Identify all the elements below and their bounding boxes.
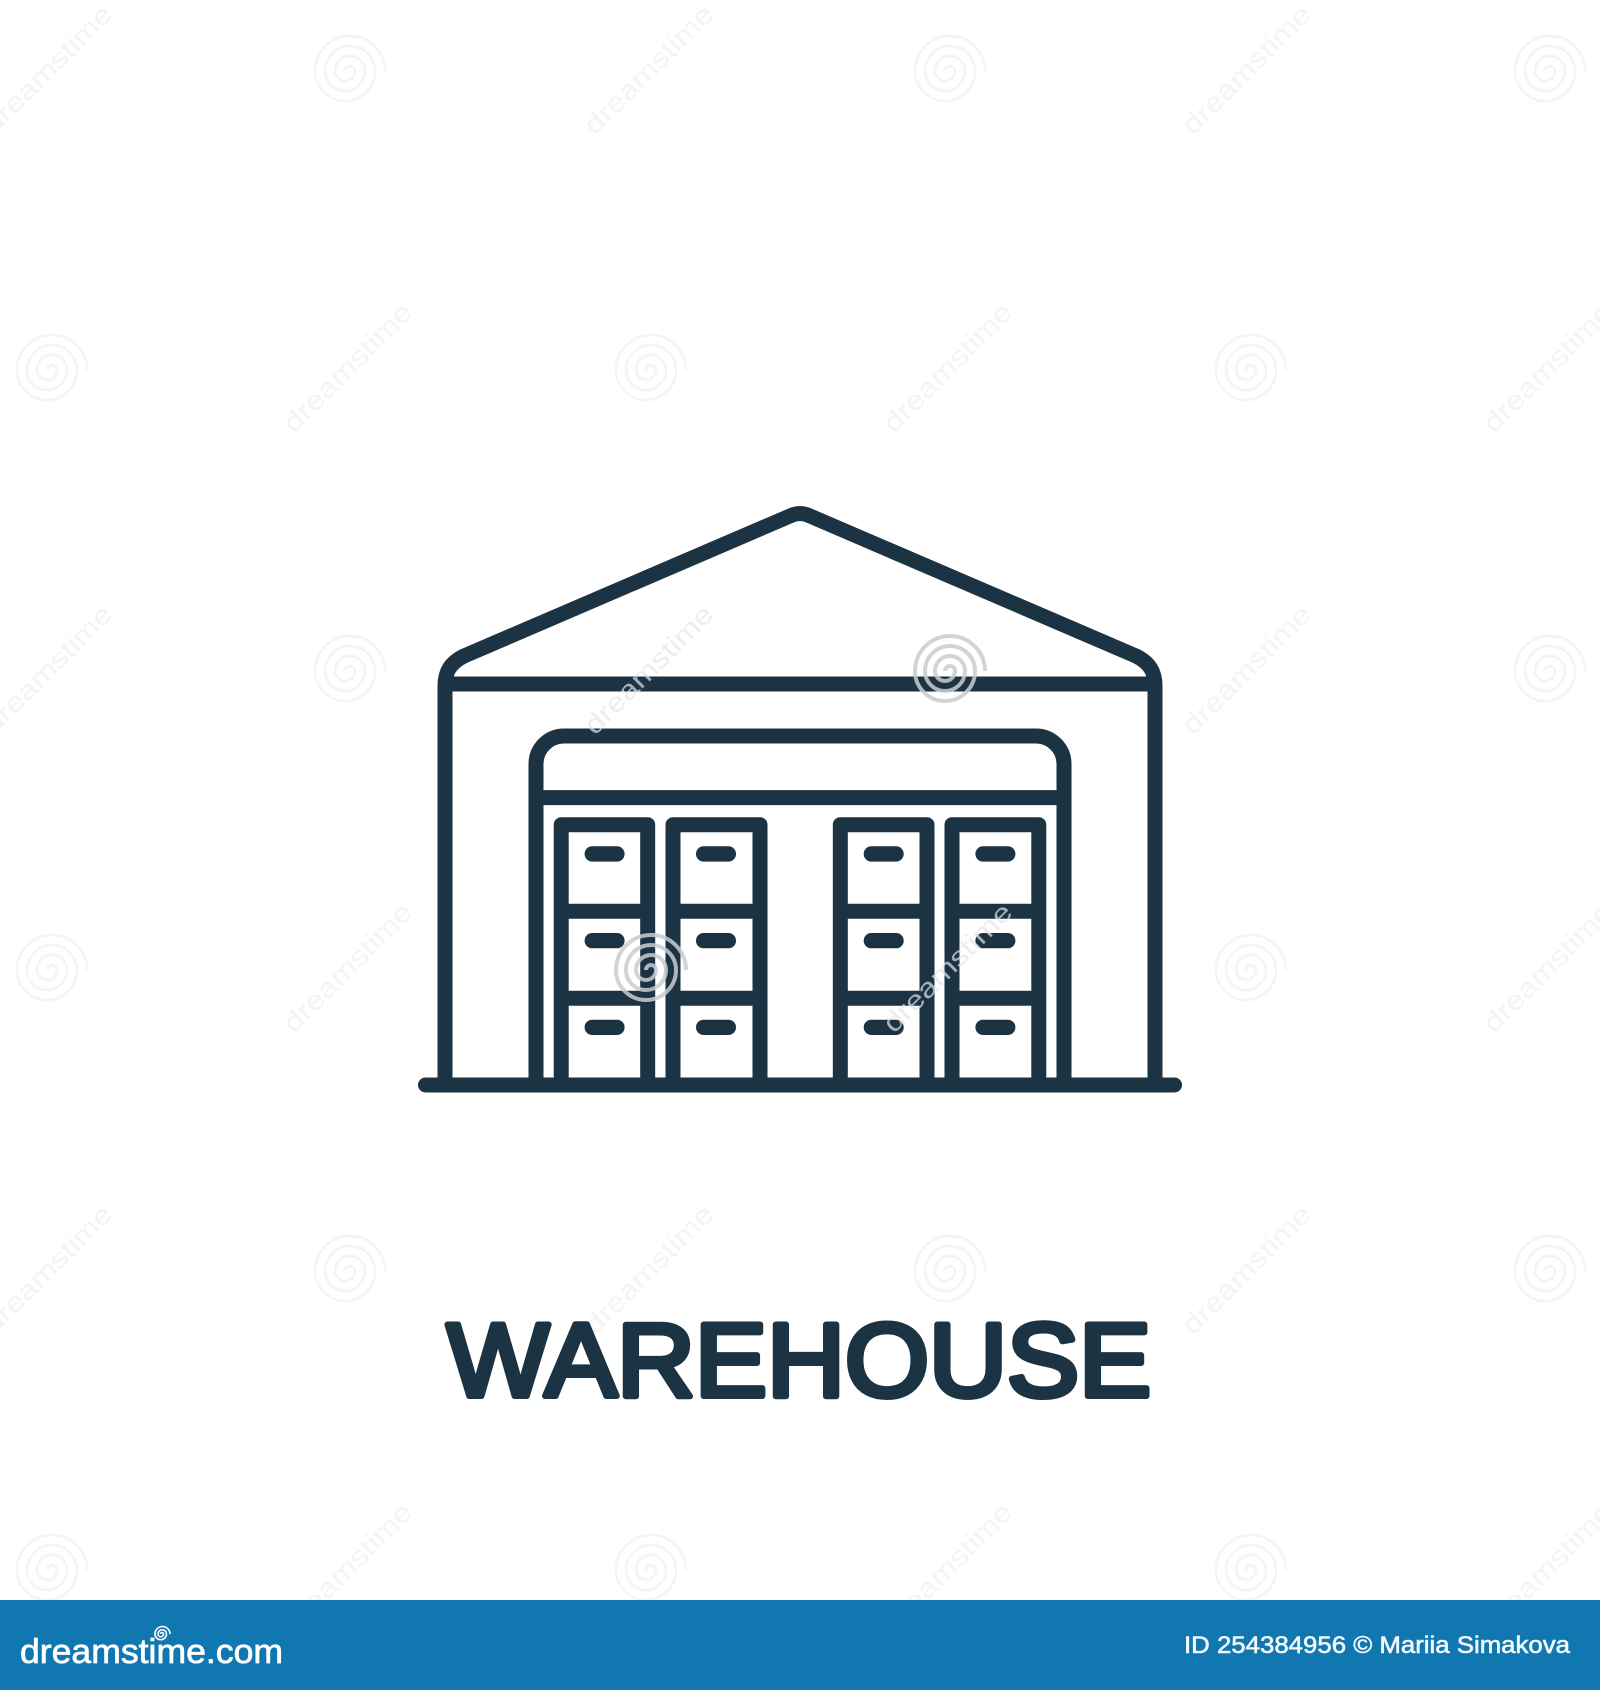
watermark pattern: pale rotated text: dreamstime: [578, 1199, 719, 1340]
watermark pattern: pale rotated text: dreamstime: [877, 297, 1018, 438]
icon part: roof and outer walls: [445, 514, 1155, 1085]
watermark pattern: pale rotated text: dreamstime: [277, 897, 418, 1038]
footer logo: dreamstime.com: dreamstime.com: [20, 1633, 283, 1671]
watermark pattern: pale rotated text: dreamstime: [1176, 599, 1317, 740]
title: WAREHOUSE: WAREHOUSE: [447, 1303, 1151, 1419]
watermark pattern: pale rotated text: dreamstime: [277, 297, 418, 438]
footer credit: image ID and author: ID 254384956 © Mariia Simakova: [1184, 1632, 1571, 1659]
watermark pattern: pale rotated text: dreamstime: [877, 1497, 1018, 1638]
icon part: door frame: [536, 736, 1064, 1085]
watermark pattern: pale rotated text: dreamstime: [1477, 897, 1600, 1038]
watermark pattern: pale rotated text: dreamstime: [1176, 0, 1317, 140]
icon part: ground line: [426, 1078, 1174, 1092]
icon part: door header: [536, 790, 1064, 805]
watermark pattern: pale rotated text: dreamstime: [1477, 297, 1600, 438]
watermark: stronger marks over the icon: [578, 599, 1018, 1038]
watermark: stronger marks over the icon: dreamstime: [877, 897, 1018, 1038]
watermark pattern: pale rotated text: dreamstime: [1176, 1199, 1317, 1340]
icon part: right box stacks: [840, 825, 1039, 1085]
icon part: left box stacks: [561, 825, 760, 1085]
footer bar: [0, 1600, 1600, 1690]
watermark pattern: pale rotated text: dreamstime: [1477, 1497, 1600, 1638]
watermark pattern: pale rotated text: dreamstime: [578, 0, 719, 140]
icon part: box handles: [585, 846, 1015, 1035]
watermark pattern: pale rotated text: dreamstime: [277, 1497, 418, 1638]
watermark: stronger marks over the icon: dreamstime: [578, 599, 719, 740]
icon: warehouse building: [426, 514, 1174, 1085]
icon part: roof beam: [445, 676, 1155, 692]
